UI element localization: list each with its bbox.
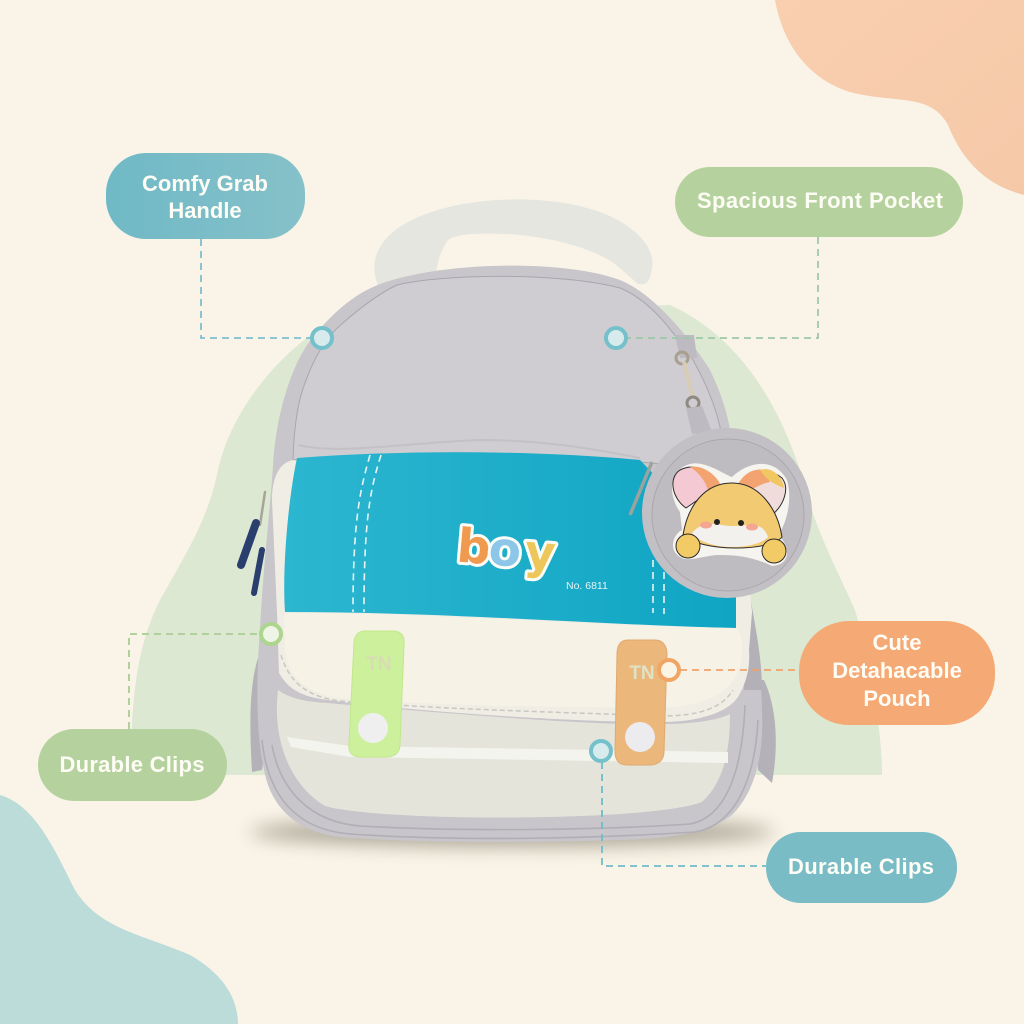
label: Spacious Front Pocket: Spacious Front Pocket [697, 188, 944, 213]
leader lines [129, 237, 818, 866]
marker: front pocket [606, 328, 626, 348]
upper panel [293, 276, 725, 470]
face [692, 524, 768, 547]
upper panel fold [298, 440, 640, 458]
head [683, 483, 782, 548]
boy logo [455, 518, 558, 582]
label: Comfy Grab Handle: Comfy Grab [142, 171, 268, 196]
label: Durable Clips right [766, 832, 957, 903]
handle [374, 199, 652, 285]
label: Durable Clips right: Durable Clips [788, 854, 934, 879]
key hook [675, 335, 712, 434]
clip label: TN [629, 663, 655, 684]
right mesh side [738, 590, 762, 690]
marker: pouch [659, 660, 679, 680]
white stripe [287, 737, 728, 763]
marker: right clip [591, 741, 611, 761]
boy logo: y [523, 524, 558, 582]
marker: grab handle [312, 328, 332, 348]
label: Comfy Grab Handle: Handle [168, 198, 242, 223]
cheeks [700, 522, 712, 528]
label: Durable Clips left [38, 729, 227, 801]
boy logo: o [487, 521, 524, 579]
teal front pocket [284, 452, 736, 628]
label: Durable Clips left: Durable Clips [60, 752, 204, 777]
cream flap [284, 613, 742, 708]
flap edge white [272, 460, 752, 722]
model number: No. 6811 [566, 580, 608, 592]
label: Cute Detachable Pouch [799, 621, 995, 725]
eyes [714, 519, 720, 525]
paws [676, 534, 700, 558]
left zip pulls [241, 492, 265, 593]
flap stitching [281, 655, 733, 716]
mouse sticker [672, 463, 789, 566]
green clip [349, 631, 404, 757]
clip snap [358, 713, 388, 743]
label: Spacious Front Pocket [675, 167, 963, 237]
marker: left clip [261, 624, 281, 644]
clip label: TN [366, 654, 392, 675]
body shell [257, 266, 762, 842]
backpack [241, 199, 812, 842]
stitching [353, 455, 664, 614]
boy logo: b [455, 518, 493, 576]
pouch zip pull [630, 462, 652, 515]
ground shadow [250, 817, 774, 847]
green background blob [130, 305, 882, 775]
label: Comfy Grab Handle [106, 153, 305, 239]
clip snap [625, 722, 655, 752]
bottom piping [262, 705, 758, 838]
label: Cute Detachable Pouch: Cute [873, 630, 921, 655]
corner blob: teal [0, 795, 238, 1024]
tan clip [615, 640, 667, 765]
lower front panel [277, 690, 730, 818]
label: Cute Detachable Pouch: Pouch [863, 686, 931, 711]
corner blob: orange [775, 0, 1024, 195]
label: Cute Detachable Pouch: Detahacable [832, 658, 962, 683]
pouch [642, 428, 812, 598]
side tabs [250, 658, 776, 783]
ears [673, 467, 718, 508]
